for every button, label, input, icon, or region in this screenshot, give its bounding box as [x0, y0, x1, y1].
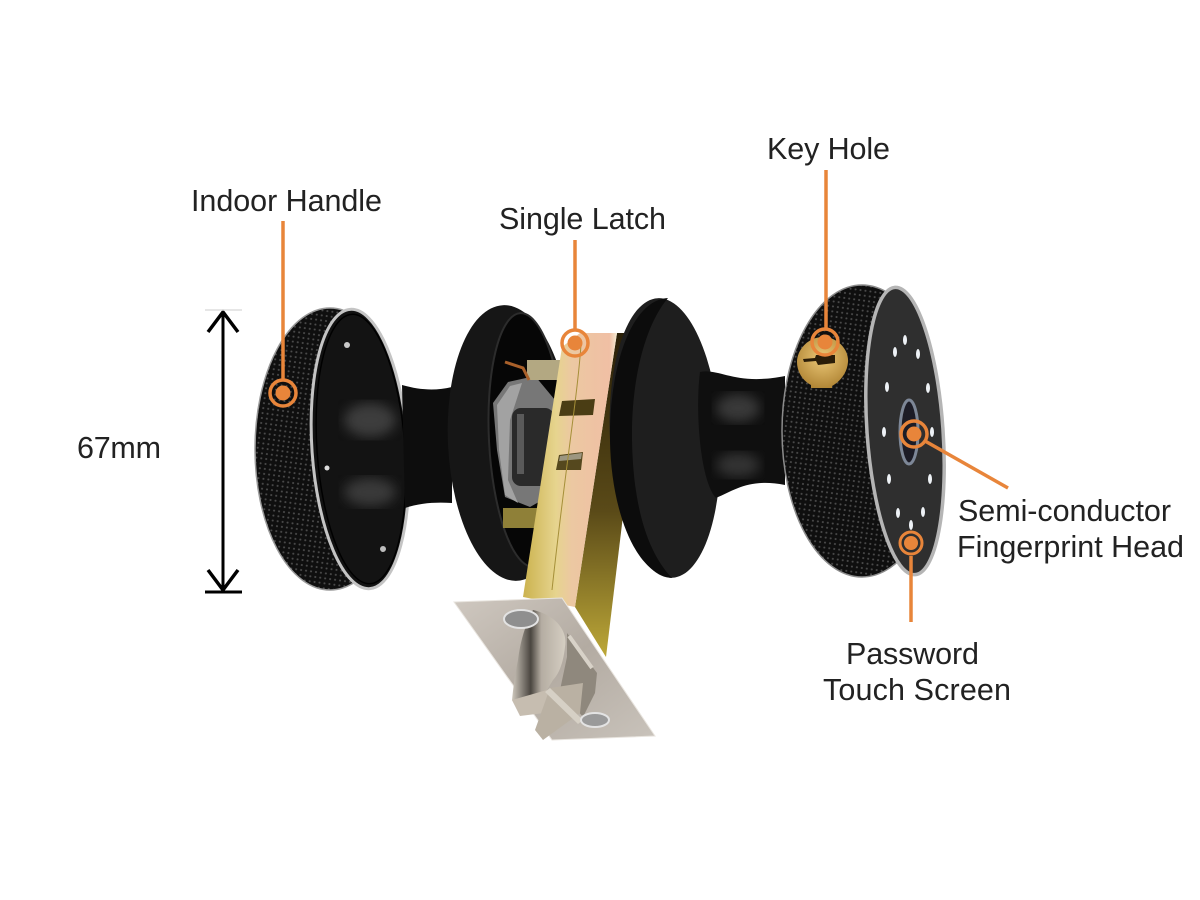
dimension arrow: 67mm: [205, 310, 242, 592]
callout: Password Touch Screen: Touch Screen: [823, 673, 1011, 707]
left rose with exposed mechanism: [441, 302, 579, 584]
callout: Single Latch: Single Latch: [499, 202, 666, 236]
bolt faceplate: [454, 598, 655, 740]
callout: Password Touch Screen: [823, 532, 1011, 707]
callout: Password Touch Screen: Password: [846, 637, 979, 671]
callout: Indoor Handle: [191, 184, 382, 406]
callout: Single Latch: [499, 202, 666, 356]
infographic: smart door lock diagram: [78, 137, 1182, 740]
door lock product illustration: [255, 285, 953, 740]
neck of outdoor knob: [698, 371, 785, 498]
fingerprint sensor: [900, 400, 918, 464]
callout: Key Hole: [767, 132, 890, 355]
callout: Indoor Handle: Indoor Handle: [191, 184, 382, 218]
mortise latch plate: [523, 333, 617, 607]
callout: Semi-conductor Fingerprint Head: Semi-conductor: [958, 494, 1171, 528]
dimension label: 67mm: [77, 431, 161, 465]
latch case body: [575, 333, 645, 657]
key cylinder: [797, 337, 848, 388]
indoor handle knob: [255, 306, 452, 592]
bolt mechanism: [504, 610, 609, 740]
callout: Semi-conductor Fingerprint Head: Fingerprint Head: [957, 530, 1184, 564]
keypad face: [857, 285, 953, 577]
callout: Key Hole: Key Hole: [767, 132, 890, 166]
neck of indoor knob: [402, 385, 452, 508]
callout: Semi-conductor Fingerprint Head: [901, 421, 1184, 564]
internal gear and spindle: [493, 360, 562, 528]
right rose: [603, 295, 727, 581]
outdoor knob with keypad: [782, 285, 953, 577]
